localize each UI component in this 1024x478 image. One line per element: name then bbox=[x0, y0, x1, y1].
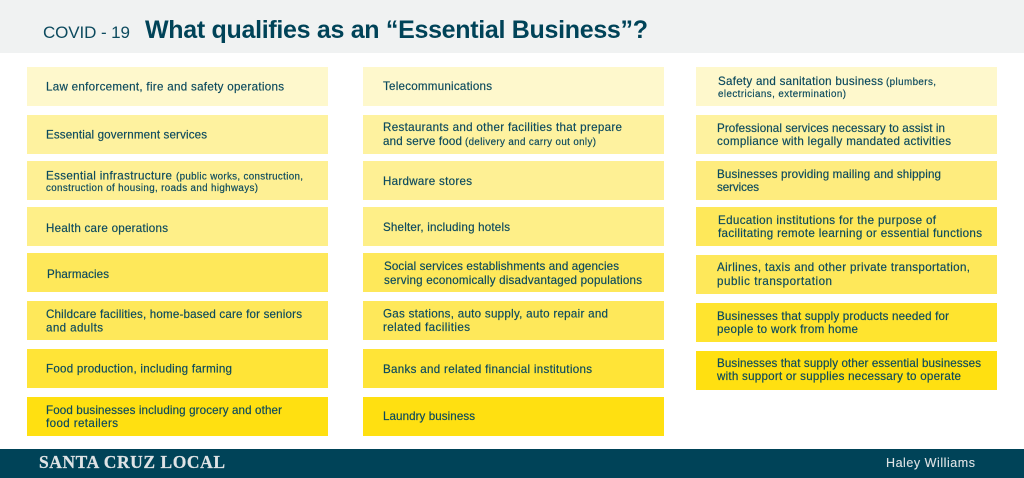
item: work from home: Businesses that supply products needed for bbox=[717, 310, 949, 323]
item: restaurants: and serve food bbox=[383, 135, 462, 148]
item: telecommunications bbox=[363, 67, 664, 106]
item: childcare bbox=[27, 301, 328, 340]
item: law enforcement bbox=[27, 67, 328, 106]
item: social services bbox=[363, 253, 664, 292]
item: food businesses bbox=[27, 397, 328, 436]
item: restaurants: Restaurants and other facilities that prepare bbox=[383, 121, 622, 134]
eyebrow: COVID - 19: COVID - 19 bbox=[43, 23, 130, 42]
item: mailing and shipping bbox=[696, 161, 997, 200]
title: What qualifies as an “Essential Business”? bbox=[145, 16, 648, 44]
panel: column 3 bbox=[696, 67, 997, 390]
item: food production bbox=[27, 349, 328, 388]
item: health care: Health care operations bbox=[46, 222, 168, 235]
panel: column 1 bbox=[27, 67, 328, 436]
item: restaurants bbox=[363, 115, 664, 154]
item: laundry: Laundry business bbox=[383, 410, 475, 423]
item: mailing and shipping: Businesses providing mailing and shipping bbox=[717, 168, 941, 181]
item: professional services: compliance with legally mandated activities bbox=[717, 135, 951, 148]
item: transportation: Airlines, taxis and other private transportation, bbox=[717, 261, 970, 274]
item: infrastructure: (public works, construction, bbox=[176, 172, 303, 182]
item: pharmacies bbox=[27, 253, 328, 292]
item: laundry bbox=[363, 397, 664, 436]
logo: Santa Cruz Local: SANTA CRUZ LOCAL bbox=[39, 452, 225, 472]
item: gas stations: Gas stations, auto supply, auto repair and bbox=[383, 308, 608, 320]
item: education bbox=[696, 207, 997, 246]
item: telecommunications: Telecommunications bbox=[383, 80, 492, 93]
item: health care bbox=[27, 207, 328, 246]
item: supply other businesses: Businesses that supply other essential businesses bbox=[717, 357, 981, 370]
item: professional services: Professional services necessary to assist in bbox=[717, 122, 945, 135]
credit: Haley Williams: Haley Williams bbox=[886, 456, 975, 470]
item: law enforcement: Law enforcement, fire and safety operations bbox=[46, 80, 284, 94]
item: food production: Food production, including farming bbox=[46, 362, 232, 376]
item: hardware stores: Hardware stores bbox=[383, 175, 472, 188]
item: safety and sanitation: electricians, extermination) bbox=[718, 89, 846, 100]
item: education: Education institutions for the purpose of bbox=[718, 214, 937, 227]
item: government services: Essential government services bbox=[46, 128, 207, 142]
item: gas stations: related facilities bbox=[383, 321, 470, 334]
item: childcare: and adults bbox=[46, 322, 103, 334]
item: hardware stores bbox=[363, 161, 664, 200]
item: infrastructure: construction of housing, roads and highways) bbox=[46, 183, 258, 194]
item: safety and sanitation bbox=[696, 67, 997, 106]
footer band bbox=[0, 449, 1024, 478]
item: work from home: people to work from home bbox=[717, 323, 858, 336]
item: gas stations bbox=[363, 301, 664, 340]
item: infrastructure bbox=[27, 161, 328, 200]
item: transportation bbox=[696, 255, 997, 294]
item: shelter bbox=[363, 207, 664, 246]
item: work from home bbox=[696, 303, 997, 342]
item: transportation: public transportation bbox=[717, 275, 832, 288]
item: shelter: Shelter, including hotels bbox=[383, 221, 510, 234]
item: banks: Banks and related financial institutions bbox=[383, 363, 592, 376]
item: government services bbox=[27, 115, 328, 154]
item: restaurants: (delivery and carry out only) bbox=[465, 137, 596, 148]
item: banks bbox=[363, 349, 664, 388]
item: social services: Social services establishments and agencies bbox=[384, 260, 619, 273]
item: food businesses: Food businesses including grocery and other bbox=[46, 404, 282, 417]
item: pharmacies: Pharmacies bbox=[47, 268, 109, 281]
item: food businesses: food retailers bbox=[46, 417, 118, 430]
item: infrastructure: Essential infrastructure bbox=[46, 170, 172, 182]
item: professional services bbox=[696, 115, 997, 154]
item: supply other businesses bbox=[696, 351, 997, 390]
item: safety and sanitation: (plumbers, bbox=[886, 77, 936, 88]
item: safety and sanitation: Safety and sanitation business bbox=[718, 75, 883, 88]
item: mailing and shipping: services bbox=[717, 181, 759, 194]
panel: column 2 bbox=[363, 67, 664, 436]
item: supply other businesses: with support or supplies necessary to operate bbox=[716, 370, 961, 383]
item: childcare: Childcare facilities, home-based care for seniors bbox=[46, 308, 302, 321]
item: education: facilitating remote learning or essential functions bbox=[718, 227, 982, 240]
item: social services: serving economically disadvantaged populations bbox=[384, 274, 642, 287]
header band bbox=[0, 0, 1024, 53]
